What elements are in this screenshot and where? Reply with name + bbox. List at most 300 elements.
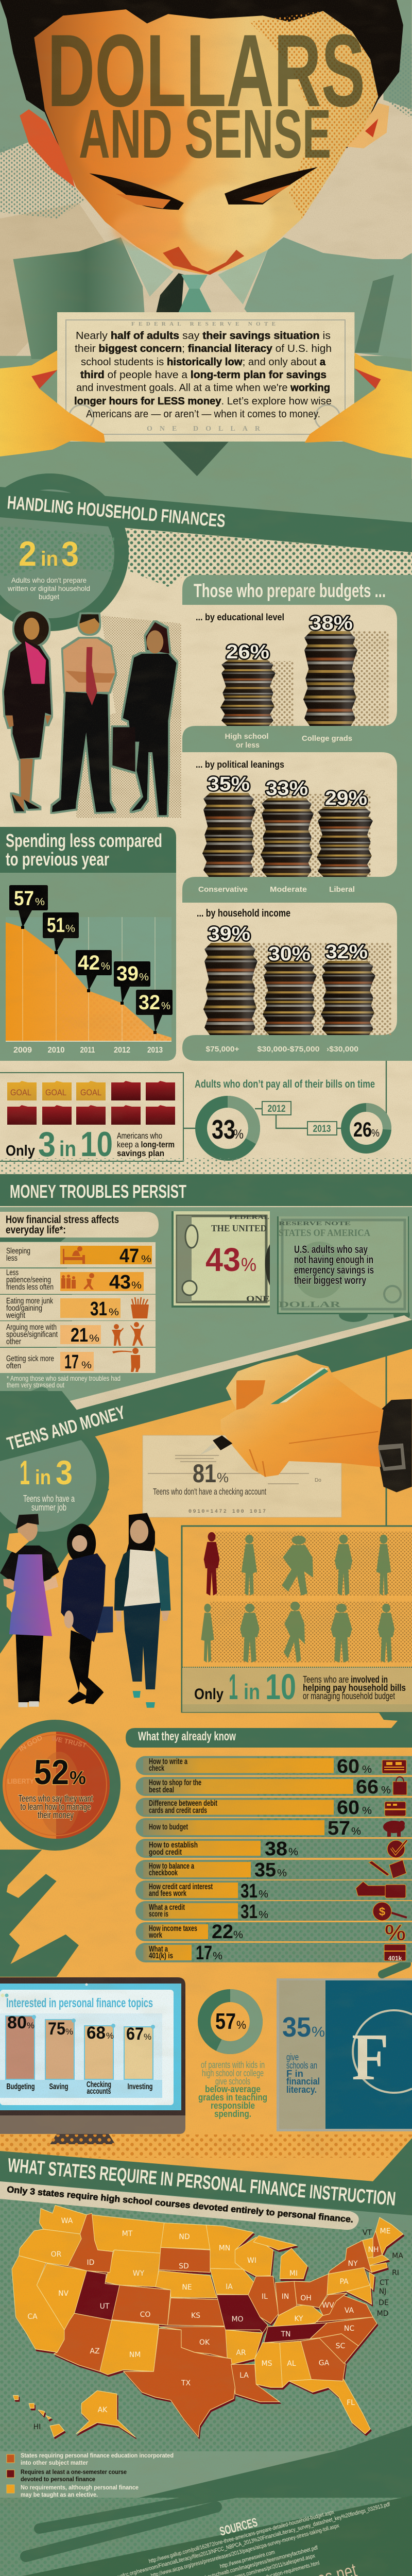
1 in 3 number <box>20 1453 73 1492</box>
callout 2012: 39%: 39 <box>116 962 139 985</box>
adult woman with briefcase <box>112 622 177 815</box>
knowledge row backgrounds <box>135 1756 412 1962</box>
interest bar: budgeting 80%: 80 <box>7 2013 27 2032</box>
blank check with 81%: 81 <box>193 1459 216 1488</box>
1 in 3 number: 3 <box>56 1453 73 1492</box>
dollar bill left with 43% <box>171 1211 270 1308</box>
legend item: one semester <box>7 2468 127 2483</box>
political labels: Liberal <box>329 885 355 894</box>
circled F <box>352 2010 412 2094</box>
2 in 3 circle <box>0 473 129 631</box>
row: balance checkbook 35%: checkbook <box>149 1869 178 1877</box>
stress footnote <box>7 1374 121 1389</box>
state labels: MI <box>289 2269 298 2278</box>
parents caption: grades in teaching <box>198 2092 267 2103</box>
35% text: % <box>312 2024 325 2040</box>
interest bar: saving 75% <box>45 2019 76 2091</box>
row: good credit 38% <box>149 1838 407 1860</box>
coin stack income under 30k 32%: 32% <box>325 941 368 963</box>
row: debit vs credit 60%: Difference between debit <box>149 1799 217 1808</box>
panel: adults who don't pay all bills on time <box>183 1061 387 1155</box>
income labels: ›$30,000 <box>327 1045 358 1054</box>
stress row: getting sick 17%: Getting sick more <box>6 1354 54 1363</box>
row: income taxes 22%: % <box>233 1929 243 1941</box>
panel: spending less compared to previous year: to previous year <box>6 849 109 870</box>
state labels: KY <box>294 2315 303 2323</box>
state labels: HI <box>33 2423 41 2431</box>
blank check with 81%: % <box>217 1470 229 1485</box>
row: write a check 60%: How to write a <box>149 1757 187 1766</box>
title: dollars and sense <box>47 13 365 173</box>
state labels: OH <box>300 2294 312 2302</box>
coin stack moderate 33% <box>261 778 314 877</box>
stress row: arguing 21%: spouse/significant <box>6 1330 58 1339</box>
icon: two people arguing <box>112 1322 144 1346</box>
interest bar: checking accounts 68% <box>84 2023 115 2096</box>
sources: SOURCES <box>218 2515 259 2539</box>
emergency savings caption: U.S. adults who say <box>294 1244 368 1256</box>
panel: what they already know <box>126 1728 412 1964</box>
state labels <box>27 2217 403 2431</box>
interest bar: checking accounts 68%: % <box>106 2031 114 2041</box>
emergency savings caption: their biggest worry <box>294 1275 366 1286</box>
blank check with 81% <box>143 1435 341 1517</box>
state labels: MA <box>392 2252 403 2260</box>
icon: 401k chest <box>384 1944 406 1962</box>
state labels: IN <box>282 2293 289 2301</box>
panel: spending less compared to previous year <box>0 827 176 1061</box>
stress chart <box>0 1242 156 1373</box>
blank check with 81%: Do <box>315 1478 321 1483</box>
suit and shirt <box>0 238 412 489</box>
35% text: financial <box>286 2076 320 2087</box>
teens and money heading: TEENS AND MONEY <box>5 1401 128 1454</box>
icon: french fries <box>131 1297 149 1318</box>
callout 2013: 32%: 32 <box>139 991 160 1014</box>
stress footnote: them very stressed out <box>7 1381 64 1389</box>
state labels: AZ <box>90 2347 100 2355</box>
stress row: getting sick 17%: 17 <box>64 1351 79 1373</box>
state labels: MN <box>219 2244 230 2252</box>
icon: check <box>382 1760 406 1773</box>
state labels: IL <box>262 2293 268 2301</box>
icon: person in bed <box>63 1246 85 1264</box>
interest bar: checking accounts 68%: accounts <box>87 2087 111 2096</box>
state labels: SC <box>336 2342 346 2350</box>
row: 401k 17%: % <box>213 1951 222 1962</box>
coin stack income 30-75k 30% <box>263 943 317 1035</box>
state labels: ND <box>179 2233 190 2241</box>
section: handling household finances <box>0 473 412 1174</box>
intro paragraph <box>74 330 332 420</box>
intro paragraph: Nearly half of adults say their savings situation is <box>76 330 331 342</box>
legend item: one semester: Requires at least a one-semester course <box>21 2468 127 2476</box>
blank check with 81%: Teens who don't have a checking account <box>153 1486 266 1497</box>
legend item: no requirements: No requirements, although personal finance <box>21 2484 139 2491</box>
donut: parents 57%: 57 <box>215 2009 236 2034</box>
icon: credit card <box>385 1802 406 1816</box>
penny with 52%: IN GOD <box>18 1734 44 1753</box>
stress row: getting sick 17%: often <box>6 1362 21 1370</box>
coin stack income 75k+ 39% <box>203 923 258 1035</box>
stress row: junk food 31%: % <box>109 1307 119 1318</box>
teen in navy coat <box>61 1524 113 1704</box>
penny with 52%: % <box>70 1767 86 1788</box>
dollar bill left with 43%: THE UNITED <box>211 1223 267 1233</box>
2 in 3 number: in <box>41 548 58 570</box>
dollar bill with intro text <box>57 312 354 442</box>
row: 401k 17% <box>149 1942 406 1964</box>
state labels: IA <box>226 2283 233 2291</box>
row: debit vs credit 60%: cards and credit cards <box>149 1806 207 1815</box>
row: credit card interest 31%: % <box>259 1889 268 1900</box>
stress row: junk food 31% <box>6 1297 149 1320</box>
state labels: SD <box>179 2262 189 2270</box>
decorative green stripes left <box>0 1850 79 1977</box>
icon: checkmark circle <box>387 1840 407 1858</box>
legend item: incorporated: States requiring personal finance education incorporated <box>21 2452 174 2459</box>
blank check with 81%: 0910=1472 100 1017 <box>188 1509 266 1515</box>
state labels: NM <box>129 2351 141 2359</box>
subheading strip: Only 3 states require high school courses devoted entirely to personal finance. <box>7 2184 354 2225</box>
intro paragraph: their biggest concern; financial literacy of U.S. high <box>75 343 332 354</box>
interest bar: checking accounts 68%: Checking <box>87 2080 111 2089</box>
computer monitor with interest chart <box>0 1977 185 2144</box>
sources: http://www.gallup.com/poll/162872/one-three-americans-prepare-detailed-household-budget.aspx <box>148 2509 335 2565</box>
savings plan caption <box>117 1131 175 1158</box>
intro paragraph: Americans are — or aren’t — when it comes to money. <box>86 408 320 420</box>
coin stack college grads 38%: 38% <box>310 613 353 634</box>
budgets by educational level: ... by educational level <box>196 612 284 622</box>
callout 2009: 57% <box>9 885 48 927</box>
section: teens and money <box>0 1315 412 2158</box>
stress row: arguing 21%: other <box>6 1337 21 1346</box>
state labels: GA <box>319 2359 330 2367</box>
donut 26 percent 2013 <box>345 1108 387 1149</box>
dollar bill right with caption <box>277 1216 410 1322</box>
stress row: arguing 21% <box>6 1322 144 1346</box>
row: write a check 60%: 60 <box>337 1756 359 1777</box>
interest bar: budgeting 80% <box>6 2013 36 2091</box>
coin stack income 30-75k 30%: 30% <box>268 943 311 965</box>
states backdrop <box>0 2138 412 2576</box>
icon: 401k chest: 401k <box>388 1955 402 1962</box>
budgets by political leanings <box>196 759 373 894</box>
savings plan caption: keep a long-term <box>117 1140 175 1149</box>
education labels: or less <box>236 741 260 750</box>
row: debit vs credit 60% <box>149 1797 406 1819</box>
map legend <box>7 2452 174 2498</box>
2 in 3 caption <box>7 576 90 601</box>
2 in 3 caption: Adults who don't prepare <box>11 576 87 584</box>
coin stack income under 30k 32% <box>321 941 375 1035</box>
stress row: sleeping less 47% <box>6 1245 152 1267</box>
education labels: College grads <box>302 734 352 743</box>
budgets by political leanings: ... by political leanings <box>196 759 284 770</box>
icon: person sneezing <box>112 1348 140 1372</box>
emergency savings caption <box>294 1244 374 1286</box>
coin stack liberal 29% <box>317 788 373 877</box>
goal folders: GOAL <box>10 1088 31 1097</box>
icon: magnifying glass: $ <box>379 1905 385 1918</box>
stress row: junk food 31%: food/gaining <box>6 1304 42 1313</box>
summer job caption: Teens who have a <box>23 1494 75 1504</box>
parents caption: below-average <box>205 2084 261 2094</box>
row: budget 57%: 57 <box>328 1818 350 1839</box>
35% text: give <box>286 2052 299 2062</box>
section: money troubles persist <box>0 1174 412 2215</box>
35% text: 35 <box>282 2012 311 2043</box>
state labels: ID <box>87 2259 94 2267</box>
state labels: RI <box>392 2269 399 2277</box>
callout 2011: 42%: % <box>101 961 110 972</box>
state labels: CT <box>380 2279 389 2287</box>
coin stack moderate 33%: 33% <box>266 778 308 800</box>
state labels: NC <box>344 2325 354 2333</box>
parents caption <box>198 2060 267 2119</box>
halftone band <box>126 529 412 587</box>
donut 33 percent 2012: % <box>233 1127 244 1142</box>
sources: http://www.prnewswire.com <box>219 2549 276 2570</box>
coin stack high school 26%: 26% <box>226 641 269 663</box>
icon: pen and checkbook <box>369 1860 406 1878</box>
state labels: MO <box>231 2315 244 2324</box>
state labels: PA <box>339 2278 349 2286</box>
state labels: TX <box>181 2379 191 2387</box>
manage money caption: their money <box>38 1810 74 1820</box>
stress row: sleeping less 47%: Sleeping <box>6 1247 30 1256</box>
interest bar: investing 67%: % <box>144 2032 151 2042</box>
state labels: VA <box>345 2307 354 2315</box>
state labels: NE <box>182 2283 192 2292</box>
state labels: VT <box>363 2229 372 2237</box>
1 in 10 caption <box>303 1674 406 1701</box>
panel: 1 in 10 teens silhouettes <box>182 1526 412 1712</box>
emergency savings caption: not having enough in <box>294 1254 373 1266</box>
only 3 in 10 number: in <box>59 1137 76 1161</box>
state labels: OR <box>51 2250 62 2259</box>
decorative dots strip <box>0 2134 412 2158</box>
2 in 3 caption: written or digital household <box>7 584 90 592</box>
budgets by household income: ... by household income <box>197 908 290 919</box>
icon: friends and lone walker <box>61 1273 94 1290</box>
intro paragraph: longer hours for LESS money. Let’s explore how wise <box>74 395 332 407</box>
coin stack conservative 35% <box>202 773 256 877</box>
state labels: OK <box>199 2338 210 2347</box>
donut 26 percent 2013: % <box>371 1128 380 1139</box>
row: budget 57% <box>149 1818 405 1839</box>
stress row: junk food 31%: weight <box>6 1311 26 1320</box>
goal folders <box>7 1081 175 1125</box>
teens section band <box>0 1315 412 1526</box>
icon: hand and credit card <box>356 1882 406 1898</box>
hand writing with pen <box>200 1354 412 1492</box>
lower band backdrop <box>0 2426 412 2576</box>
dollar bill with intro text: FEDERAL RESERVE NOTE <box>131 321 276 327</box>
stress row: less patience 43%: patience/seeing <box>6 1276 51 1284</box>
emergency savings caption: emergency savings is <box>294 1264 374 1276</box>
2 in 3 number: 2 <box>19 534 37 573</box>
teen in purple apron <box>0 1514 59 1707</box>
income labels: $75,000+ <box>206 1045 239 1054</box>
stress footnote: * Among those who said money troubles had <box>7 1374 121 1382</box>
dollar bill right with caption: DOLLAR <box>279 1300 341 1309</box>
legend item: one semester: devoted to personal finance <box>21 2476 95 2483</box>
stress pill heading <box>0 1212 159 1242</box>
1 in 10 strip <box>182 1667 412 1712</box>
area chart <box>6 885 173 1055</box>
coin stack high school 26% <box>220 641 276 726</box>
row: good credit 38%: How to establish <box>149 1841 198 1850</box>
row: credit card interest 31% <box>149 1880 406 1902</box>
35% text: schools an <box>286 2060 317 2071</box>
callout 2011: 42%: 42 <box>78 952 100 974</box>
row: 401k 17%: 401(k) is <box>149 1952 173 1960</box>
year label 2013: 2013 <box>313 1124 331 1134</box>
coin stack college grads 38% <box>303 613 357 726</box>
donut: parents 57%: % <box>236 2019 246 2031</box>
state labels: NY <box>348 2260 358 2268</box>
band and heading: HANDLING HOUSEHOLD FINANCES <box>6 492 226 531</box>
intro paragraph: school students is historically low; and only about a <box>81 356 326 368</box>
legend item: no requirements: may be taught as an elective. <box>21 2491 98 2498</box>
stress row: arguing 21%: 21 <box>71 1325 88 1346</box>
row: credit score 31% <box>149 1901 407 1923</box>
row: shop for best deal 66%: 66 <box>356 1776 379 1798</box>
only 3 in 10 number: 10 <box>80 1125 113 1164</box>
icon: shopping bag <box>393 1777 407 1795</box>
manage money caption <box>19 1793 93 1820</box>
donut: parents 57% <box>198 1996 267 2119</box>
state labels: NV <box>58 2290 68 2298</box>
penny with 52%: WE TRUST <box>51 1734 87 1749</box>
row: shop for best deal 66% <box>149 1776 407 1798</box>
state labels: MT <box>122 2230 133 2238</box>
row: write a check 60%: check <box>149 1764 164 1773</box>
row: credit score 31%: score is <box>149 1910 168 1919</box>
parents caption: spending. <box>214 2109 251 2119</box>
money troubles heading band <box>0 1174 412 1207</box>
education labels: High school <box>225 732 269 741</box>
stress row: getting sick 17% <box>6 1348 140 1373</box>
year label 2012: 2012 <box>268 1104 285 1114</box>
adult woman in pink blouse <box>4 612 51 811</box>
legend item: incorporated: into other subject matter <box>21 2459 88 2466</box>
donut 33 percent 2012 <box>201 1101 254 1155</box>
panel: what they already know: What they already know <box>138 1730 236 1743</box>
summer job caption: summer job <box>31 1502 66 1513</box>
state labels: WY <box>133 2269 145 2278</box>
interest bar: budgeting 80%: % <box>27 2021 35 2030</box>
US map <box>12 2205 403 2437</box>
penny with 52%: LIBERTY <box>7 1777 35 1785</box>
year axis labels: 2010 <box>47 1046 65 1055</box>
section: what states require <box>0 2138 412 2576</box>
icon: piggy bank <box>383 1821 405 1837</box>
dollar bill left with 43%: ONE <box>246 1295 270 1303</box>
stress row: junk food 31%: 31 <box>90 1298 107 1320</box>
state labels: AL <box>287 2360 296 2368</box>
stress row: sleeping less 47%: 47 <box>119 1245 139 1267</box>
year label 2012 <box>262 1101 291 1115</box>
row: income taxes 22%: work <box>148 1931 162 1940</box>
row: shop for best deal 66%: % <box>381 1785 391 1796</box>
interest bar: investing 67%: 67 <box>126 2024 144 2044</box>
row: credit card interest 31%: How credit card interest <box>149 1883 213 1891</box>
penny with 52% <box>0 1720 121 1851</box>
dollar bill with intro text: ONE DOLLAR <box>147 425 261 433</box>
donut 26 percent 2013: 26 <box>353 1118 372 1141</box>
row: credit card interest 31%: 31 <box>241 1880 258 1902</box>
state labels: KS <box>191 2312 200 2320</box>
callout 2011: 42% <box>76 950 112 991</box>
row: income taxes 22% <box>148 1920 406 1945</box>
row: balance checkbook 35%: How to balance a <box>149 1862 194 1871</box>
1 in 3 circle <box>0 1391 109 1654</box>
hair and head <box>0 0 403 275</box>
only 3 in 10 number <box>6 1125 113 1164</box>
political labels <box>198 885 355 894</box>
row: income taxes 22%: 22 <box>212 1921 233 1943</box>
three adults <box>4 612 181 818</box>
row: shop for best deal 66%: How to shop for the <box>149 1778 201 1787</box>
row: credit score 31%: % <box>259 1909 268 1921</box>
interest bar: saving 75%: 75 <box>48 2019 65 2039</box>
row: good credit 38%: 38 <box>265 1838 287 1860</box>
callout 2009: 57%: 57 <box>14 887 34 910</box>
icon: percent sign: % <box>385 1920 406 1945</box>
legend item: incorporated <box>7 2452 174 2466</box>
row: credit score 31%: What a credit <box>149 1903 185 1912</box>
row: budget 57%: % <box>351 1826 361 1837</box>
knowledge bars <box>143 1758 353 1960</box>
state labels: MS <box>262 2360 272 2368</box>
interest bar: investing 67% <box>124 2024 155 2091</box>
35% text: F in <box>286 2069 303 2079</box>
row: good credit 38%: good credit <box>149 1848 182 1857</box>
coin stack conservative 35%: 35% <box>208 773 250 795</box>
corner decorations <box>379 1712 412 1974</box>
callout 2012: 39% <box>114 961 150 1003</box>
income labels <box>206 1045 358 1054</box>
stress row: getting sick 17%: % <box>81 1360 92 1371</box>
row: 401k 17%: What a <box>149 1945 168 1954</box>
parents caption: high school or college <box>202 2068 264 2078</box>
panel: those who prepare budgets <box>182 575 412 1061</box>
state shapes <box>12 2205 403 2437</box>
stress row: less patience 43%: % <box>131 1280 142 1291</box>
stress row: less patience 43%: friends less often <box>6 1283 54 1292</box>
education labels <box>225 732 352 750</box>
year axis labels: 2009 <box>13 1046 32 1055</box>
hero illustration: man holding dollar <box>0 0 412 489</box>
row: balance checkbook 35%: % <box>277 1868 287 1879</box>
1 in 10 strip: in <box>244 1680 260 1704</box>
silhouette rows other teens <box>201 1535 394 1663</box>
section backdrop <box>0 479 412 1174</box>
state labels: NH <box>368 2246 379 2254</box>
1 in 10 caption: Teens who are involved in <box>303 1674 388 1685</box>
state labels: WI <box>247 2257 256 2265</box>
political labels: Moderate <box>270 885 307 894</box>
2 in 3 caption: budget <box>39 592 59 601</box>
stress row: arguing 21%: % <box>89 1333 99 1344</box>
1 in 10 strip: 10 <box>265 1667 296 1707</box>
interest bar: investing 67%: Investing <box>128 2082 152 2091</box>
row: write a check 60% <box>149 1756 406 1777</box>
callout 2010: 51%: 51 <box>47 914 65 937</box>
state labels: CO <box>140 2311 150 2319</box>
